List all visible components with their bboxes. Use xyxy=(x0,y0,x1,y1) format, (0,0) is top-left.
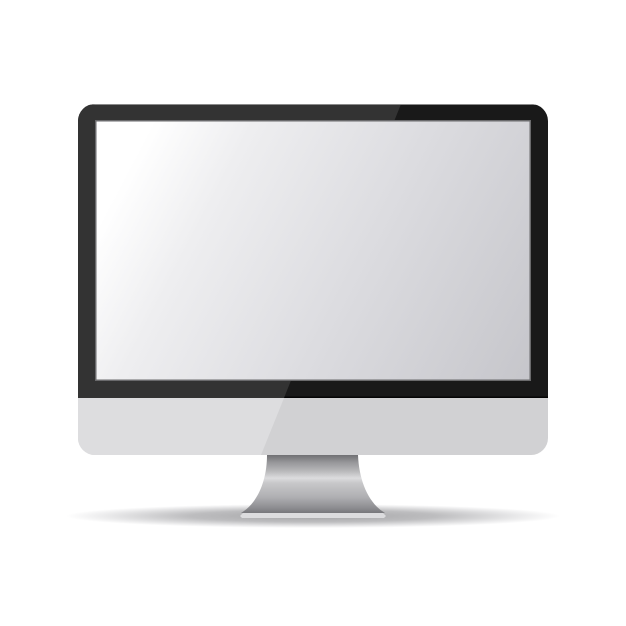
floor shadow xyxy=(66,504,560,528)
chin panel xyxy=(78,398,548,455)
glare: chin xyxy=(78,398,284,455)
stand base xyxy=(240,513,386,518)
illustration: desktop monitor xyxy=(78,104,548,527)
screen xyxy=(95,120,531,381)
monitor stand xyxy=(240,455,386,518)
black bezel xyxy=(78,104,548,398)
glare: bezel xyxy=(78,104,401,398)
monitor body xyxy=(78,104,548,455)
